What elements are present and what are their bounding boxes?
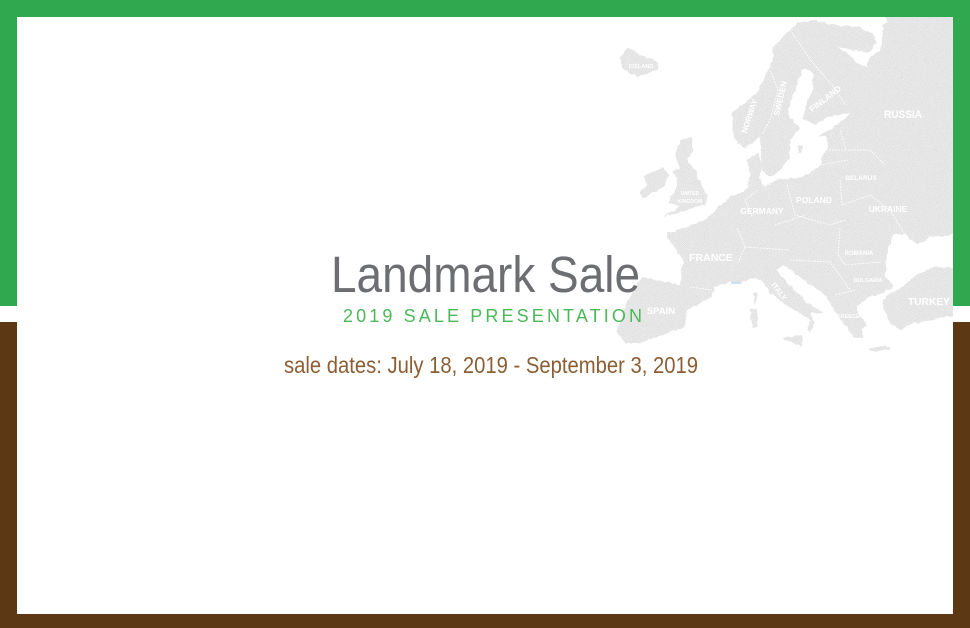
label: Poland: POLAND xyxy=(796,195,832,205)
sale dates: sale dates: July 18, 2019 - September 3, 2019 xyxy=(284,352,698,378)
label: Spain: SPAIN xyxy=(647,306,675,317)
map: landmasses xyxy=(617,5,965,351)
map of Europe xyxy=(617,5,965,351)
label: Italy: ITALY xyxy=(769,281,789,302)
map: Crete xyxy=(870,346,890,351)
label: Turkey: TURKEY xyxy=(908,296,950,308)
label: France: FRANCE xyxy=(689,252,733,264)
label: Romania: ROMANIA xyxy=(845,251,874,257)
label: Sweden: SWEDEN xyxy=(772,80,789,117)
label: Kingdom: KINGDOM xyxy=(678,199,702,205)
label: Russia: RUSSIA xyxy=(884,109,922,121)
map: Turkey xyxy=(882,266,953,330)
label: Bulgaria: BULGARIA xyxy=(853,278,883,284)
map: Sardinia xyxy=(750,308,758,328)
subtitle: 2019 SALE PRESENTATION xyxy=(343,306,642,326)
country labels xyxy=(629,64,950,320)
map: Gotland xyxy=(798,144,803,153)
label: Greece: GREECE xyxy=(836,314,860,320)
brown frame: lower border xyxy=(0,322,970,628)
map: Ireland xyxy=(640,168,670,198)
label: Germany: GERMANY xyxy=(740,206,784,216)
country borders xyxy=(690,30,905,295)
map: Great Britain xyxy=(663,137,708,217)
label: Iceland: ICELAND xyxy=(629,64,653,70)
map: Corsica xyxy=(753,292,758,304)
map: Iceland xyxy=(620,47,658,77)
label: United: UNITED xyxy=(681,191,700,197)
map: Sicily xyxy=(782,335,803,347)
label: Ukraine: UKRAINE xyxy=(869,204,908,214)
map: small blue accent on the French coast xyxy=(731,282,741,284)
green frame: upper border xyxy=(0,0,970,306)
label: Norway: NORWAY xyxy=(740,98,760,134)
title: Landmark Sale xyxy=(331,246,640,303)
label: Belarus: BELARUS xyxy=(845,175,877,182)
map: mainland Europe xyxy=(617,5,965,343)
label: Finland: FINLAND xyxy=(807,83,843,114)
